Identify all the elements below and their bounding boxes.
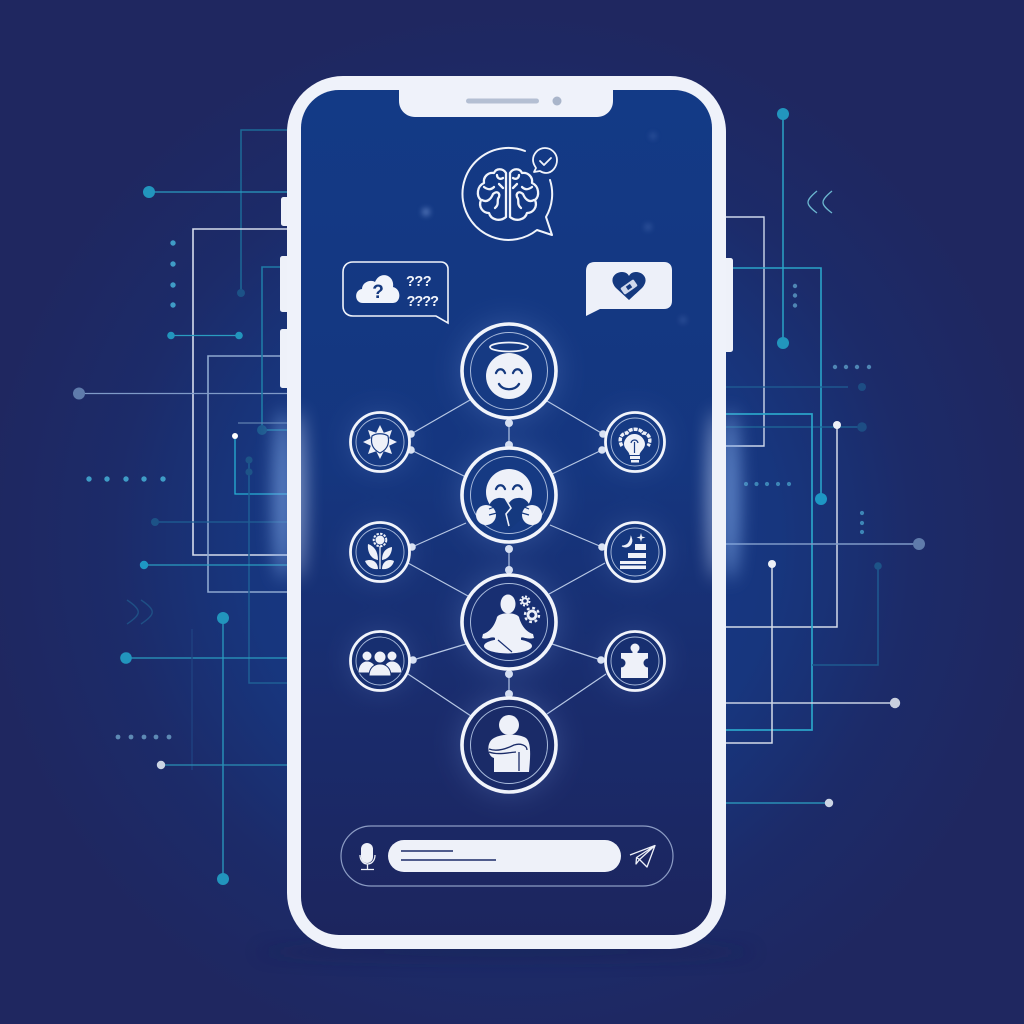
brain speech icon	[462, 148, 557, 240]
node: stairs	[606, 522, 664, 582]
node: halo smiley	[462, 324, 556, 418]
speaker	[466, 98, 539, 104]
node: meditation	[462, 575, 556, 669]
phone glow	[274, 410, 739, 580]
question speech bubble: ????	[406, 294, 439, 310]
heart speech bubble	[586, 262, 672, 316]
phone	[280, 76, 733, 949]
camera	[552, 96, 562, 106]
chat input bar	[341, 826, 673, 886]
node: shield sun	[350, 412, 410, 472]
question speech bubble: ???	[406, 274, 432, 290]
notch	[399, 89, 613, 117]
phone shadow	[256, 945, 756, 959]
question speech bubble: ?	[372, 282, 384, 303]
text input pill	[388, 840, 621, 872]
small check bubble	[533, 148, 557, 173]
microphone icon	[360, 843, 375, 870]
node: group of people	[350, 632, 410, 690]
heart with bandage	[612, 272, 646, 300]
circuit lines: left	[73, 130, 287, 885]
node: lightbulb	[606, 412, 664, 472]
phone screen	[301, 90, 712, 935]
node: puzzle piece	[606, 632, 664, 690]
send icon	[630, 846, 655, 867]
node: self hug	[462, 698, 556, 792]
cloud icon	[356, 275, 399, 303]
side buttons	[280, 197, 733, 388]
question speech bubble	[343, 262, 448, 323]
connector network	[407, 400, 607, 716]
node: flower	[350, 522, 410, 582]
brain	[478, 169, 538, 220]
phone frame	[287, 76, 726, 949]
circuit lines: right	[726, 108, 925, 807]
node: broken heart	[462, 448, 556, 542]
screen glow and particles	[290, 132, 723, 580]
circle glow	[354, 324, 661, 792]
